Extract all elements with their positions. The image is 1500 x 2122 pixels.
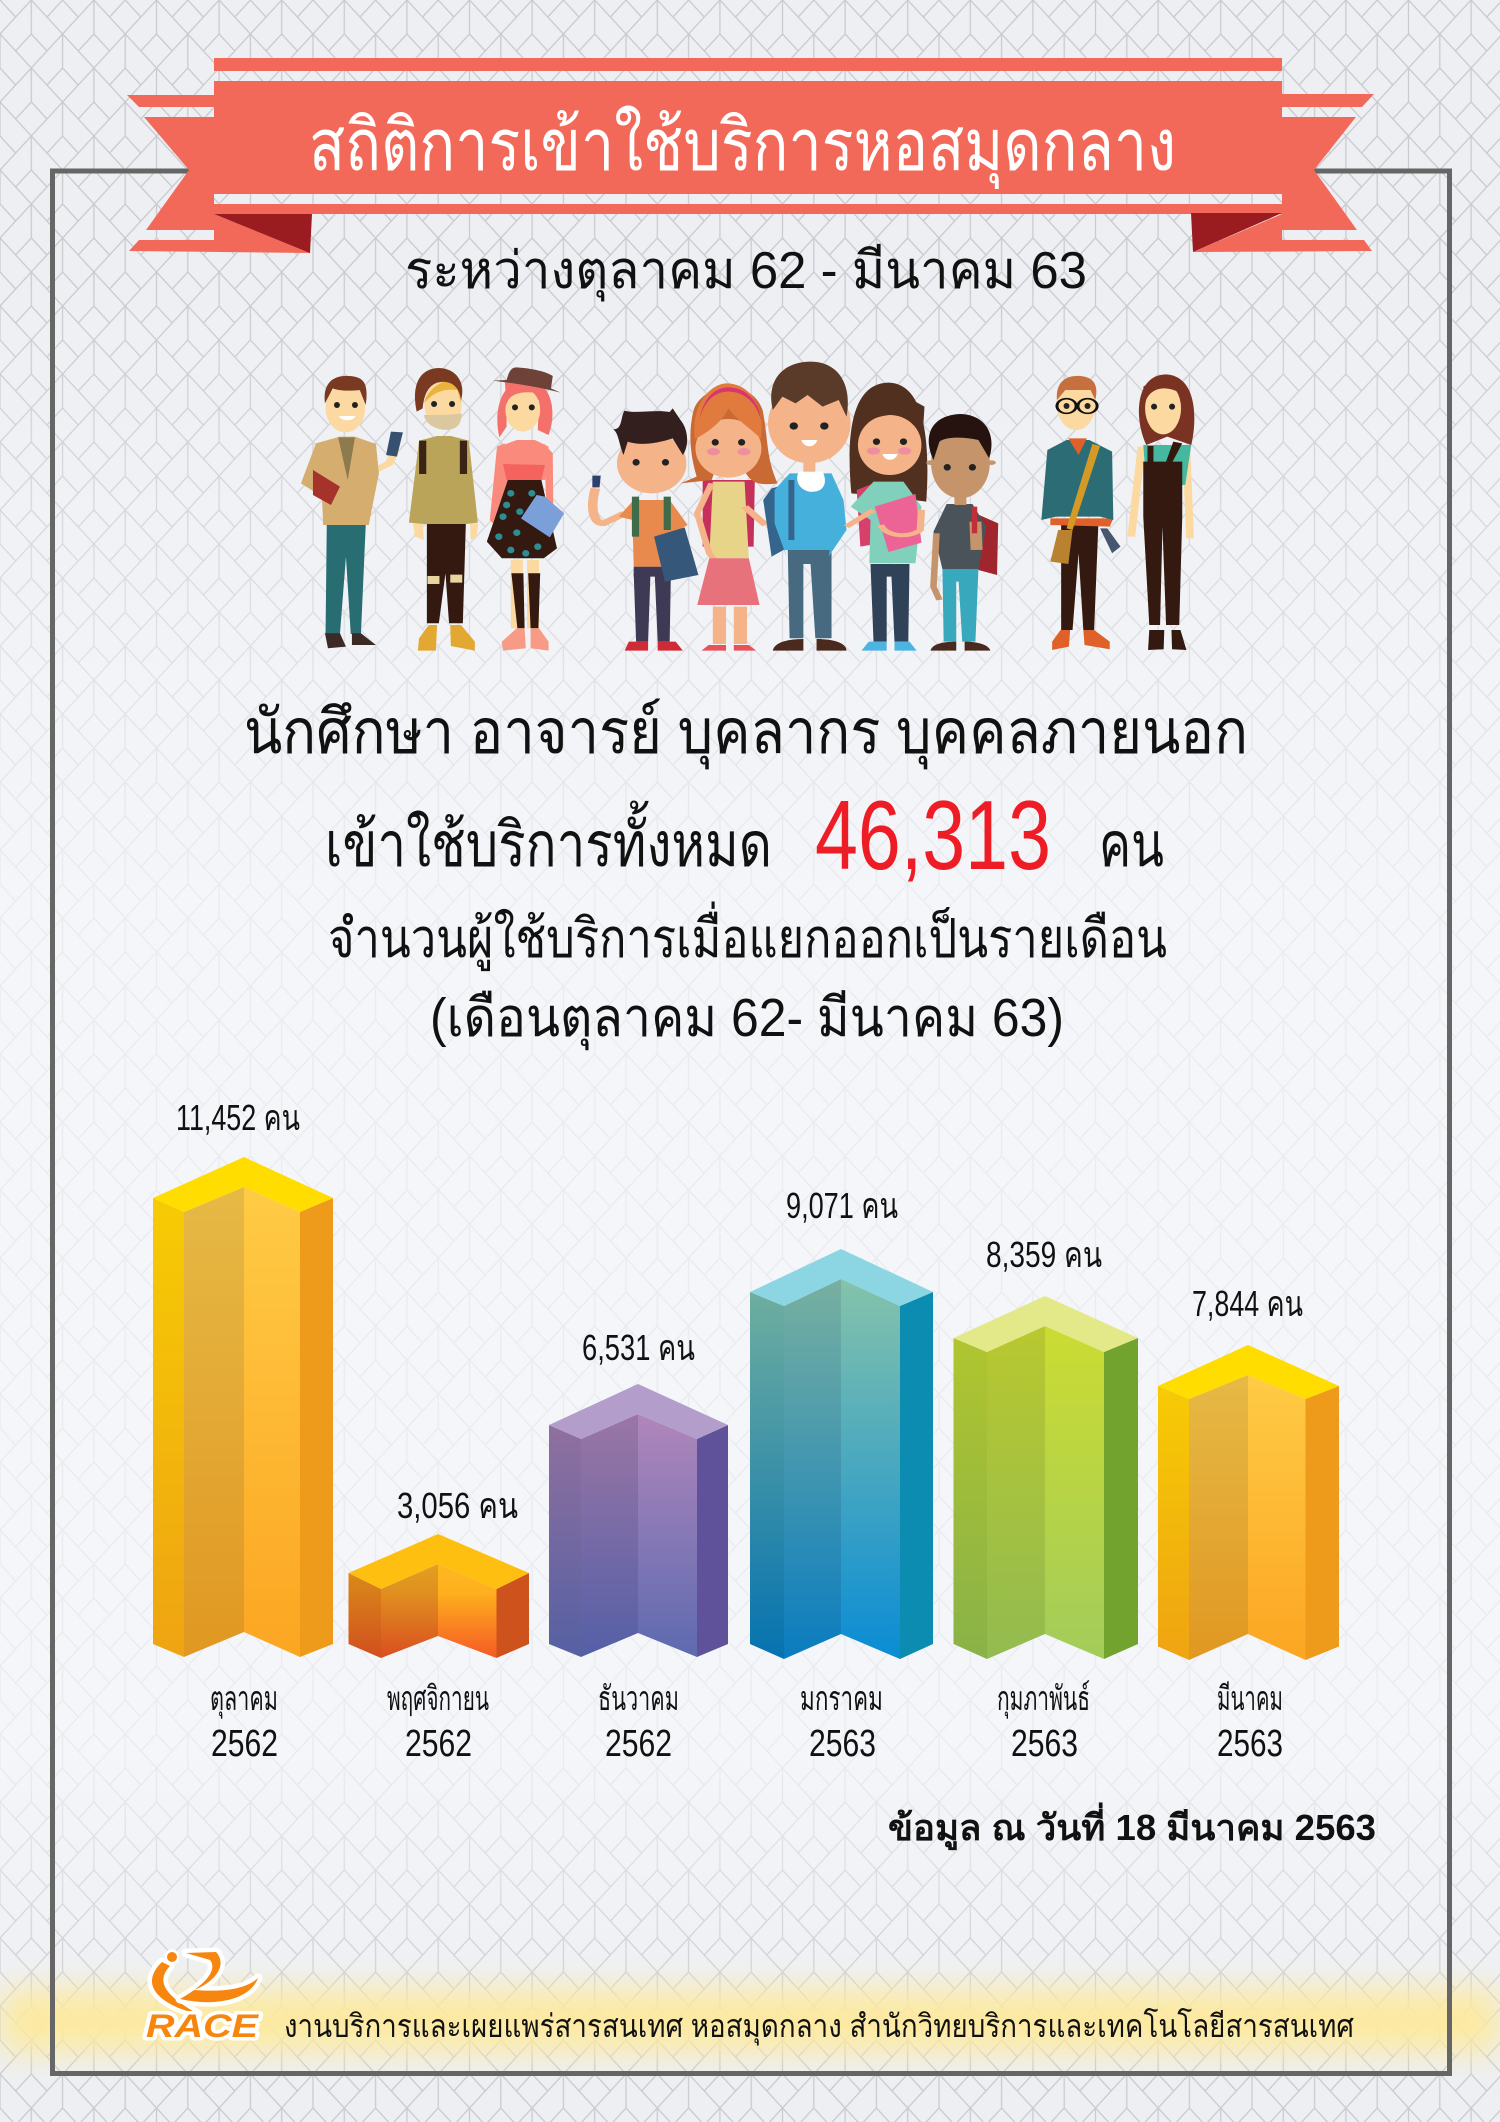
bar: มีนาคม 2563 — [1158, 1283, 1339, 1765]
person: boy with phone and folder — [592, 408, 698, 651]
bar chart — [153, 1097, 1339, 1765]
bar: ธันวาคม 2562 — [549, 1327, 728, 1765]
person: tall boy in blue — [763, 362, 851, 651]
sub headline line 1: จำนวนผู้ใช้บริการเมื่อแยกออกเป็นรายเดือน — [328, 901, 1167, 971]
headline line 1: นักศึกษา อาจารย์ บุคลากร บุคคลภายนอก — [244, 698, 1248, 769]
bar: ธันวาคม 2562: ธันวาคม — [598, 1680, 679, 1718]
bar: กุมภาพันธ์ 2563: กุมภาพันธ์ — [997, 1680, 1090, 1719]
headline line 2 with total: เข้าใช้บริการทั้งหมด — [325, 800, 772, 880]
bar: มีนาคม 2563: 7,844 คน — [1192, 1283, 1303, 1324]
bar: ธันวาคม 2562: 6,531 คน — [582, 1327, 695, 1368]
person: boy with red backpack — [926, 414, 998, 651]
person: man with book — [301, 376, 403, 648]
headline line 2 with total — [325, 780, 1164, 890]
ribbon fold right — [1191, 213, 1282, 252]
bar: มกราคม 2563: มกราคม — [800, 1680, 883, 1718]
total number: 46,313 — [815, 780, 1051, 890]
bar: มกราคม 2563: 2563 — [809, 1723, 876, 1765]
bar: กุมภาพันธ์ 2563: 2563 — [1011, 1723, 1078, 1765]
bar: มีนาคม 2563: 2563 — [1217, 1723, 1283, 1765]
person: girl with pink folder — [847, 383, 927, 651]
footer yellow band — [0, 1990, 1500, 2052]
person: man with glasses — [1041, 376, 1120, 650]
bar: ธันวาคม 2562: 2562 — [605, 1723, 672, 1765]
bar: พฤศจิกายน 2562: 2562 — [405, 1723, 472, 1765]
bar: ตุลาคม 2562 — [153, 1097, 333, 1765]
person: girl with orange hair — [680, 383, 778, 651]
sub headline line 2: (เดือนตุลาคม 62- มีนาคม 63) — [430, 988, 1064, 1051]
logo: RACE — [146, 1952, 260, 2044]
footer text: งานบริการและเผยแพร่สารสนเทศ หอสมุดกลาง สำนักวิทยบริการและเทคโนโลยีสารสนเทศ — [284, 2008, 1354, 2046]
bar: ตุลาคม 2562: 2562 — [211, 1723, 278, 1765]
bar: กุมภาพันธ์ 2563: 8,359 คน — [986, 1234, 1102, 1275]
bar: กุมภาพันธ์ 2563 — [954, 1234, 1138, 1765]
ribbon fold left — [214, 214, 312, 253]
bar: พฤศจิกายน 2562: 3,056 คน — [397, 1485, 518, 1526]
unit: คน — [1099, 811, 1164, 880]
person: woman in overalls — [1131, 374, 1194, 650]
bar: มีนาคม 2563: มีนาคม — [1217, 1680, 1283, 1718]
title ribbon — [127, 58, 1374, 253]
logo: RACE: RACE — [146, 2008, 260, 2044]
bar: มกราคม 2563: 9,071 คน — [786, 1185, 898, 1226]
bar: พฤศจิกายน 2562 — [348, 1485, 529, 1765]
people illustration — [301, 362, 1194, 651]
bar: พฤศจิกายน 2562: พฤศจิกายน — [387, 1680, 489, 1718]
person: bearded man with beanie — [409, 368, 478, 651]
bar: มกราคม 2563 — [750, 1185, 933, 1765]
subtitle: ระหว่างตุลาคม 62 - มีนาคม 63 — [405, 242, 1087, 302]
data date note: ข้อมูล ณ วันที่ 18 มีนาคม 2563 — [888, 1802, 1376, 1851]
bar: ตุลาคม 2562: ตุลาคม — [210, 1680, 278, 1719]
person: woman with hat — [487, 367, 564, 651]
bar: ตุลาคม 2562: 11,452 คน — [176, 1097, 300, 1138]
main title: สถิติการเข้าใช้บริการหอสมุดกลาง — [309, 105, 1176, 189]
